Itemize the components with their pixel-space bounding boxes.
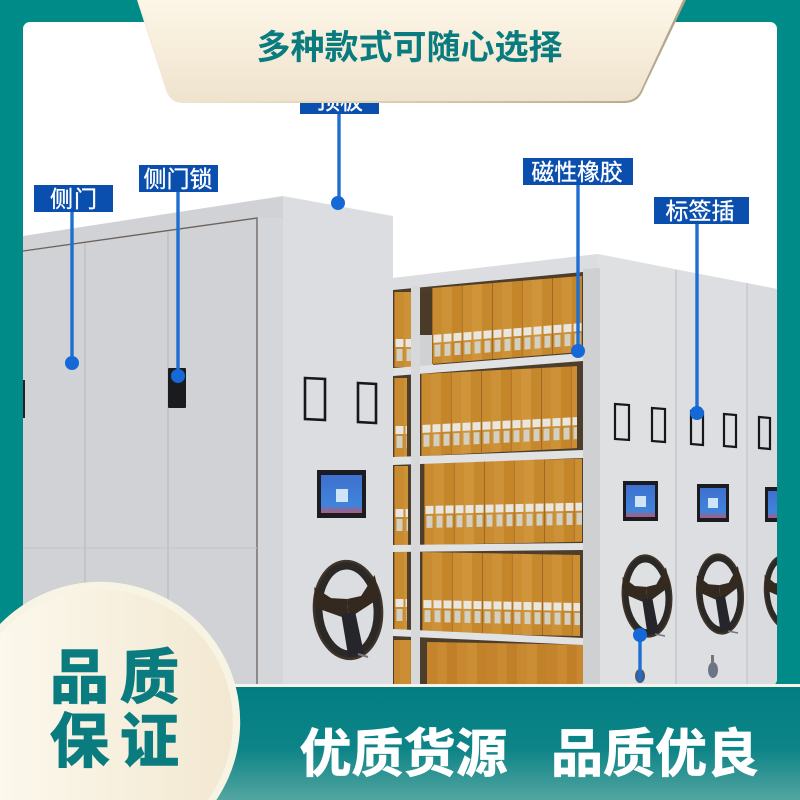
callout: 磁性橡胶: 磁性橡胶 <box>531 159 623 185</box>
icon: side door lock <box>168 368 186 408</box>
band text right: 品质优良 <box>551 726 759 784</box>
label holder frames on left cabinet <box>305 378 376 423</box>
callout: 顶板 <box>300 103 379 210</box>
title text: 多种款式可随心选择 <box>256 29 562 67</box>
title banner <box>137 0 686 103</box>
callout: 磁性橡胶 <box>523 158 633 358</box>
icon: hand wheel on left cabinet <box>311 559 385 661</box>
callout: 顶板: 顶板 <box>317 88 363 114</box>
icons: hand wheels on right cabinets <box>622 553 777 638</box>
icon: floor locks <box>635 655 718 683</box>
callout: 侧门锁 <box>139 165 218 383</box>
callout: 侧门锁: 侧门锁 <box>144 166 212 192</box>
archive binders <box>394 276 583 695</box>
shelves and post <box>393 286 583 686</box>
callout marker: lower wheel <box>633 628 647 682</box>
label holder frames on right cabinets <box>615 404 770 449</box>
quality badge circle <box>0 582 240 800</box>
band text left: 优质货源 <box>299 726 508 784</box>
shelving interior <box>393 272 583 686</box>
callout: 标签插 <box>654 197 749 420</box>
callout: 侧门 <box>34 185 113 370</box>
right cabinet <box>393 254 777 686</box>
touch screens on right cabinets <box>623 481 779 522</box>
touch screen on left cabinet <box>317 470 366 518</box>
callout: 标签插: 标签插 <box>666 198 734 224</box>
badge text line 1: 品质 <box>50 645 190 711</box>
callout: 侧门: 侧门 <box>50 186 98 212</box>
badge text line 2: 保证 <box>50 709 190 775</box>
bottom band <box>200 684 800 800</box>
left cabinet <box>23 196 393 686</box>
